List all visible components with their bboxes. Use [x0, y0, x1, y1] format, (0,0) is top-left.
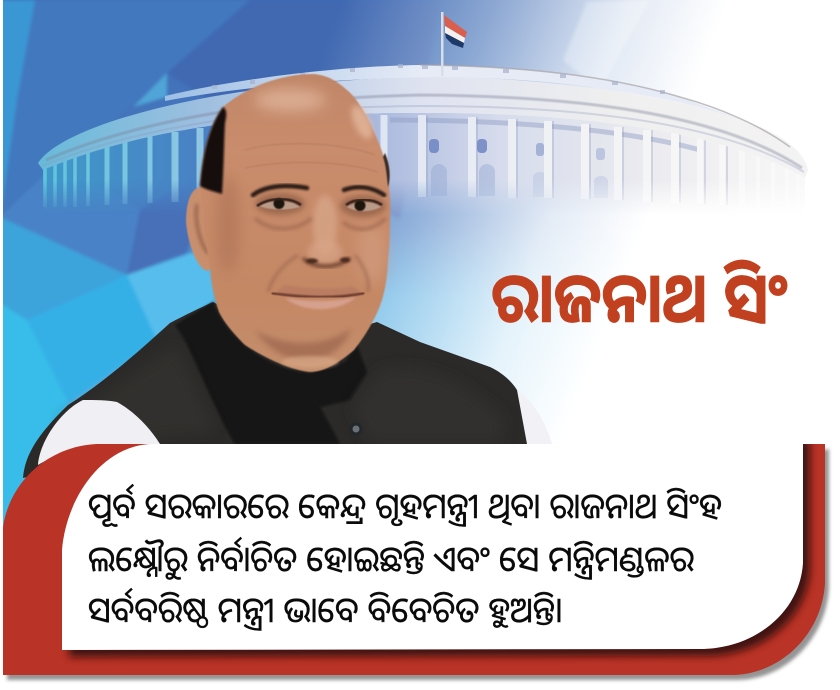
- panel: caption box: [3, 440, 829, 680]
- vest: [23, 302, 527, 478]
- forehead wrinkles: [245, 144, 378, 172]
- caption line 3: ସର୍ବବରିଷ୍ଠ ମନ୍ତ୍ରୀ ଭାବେ ବିବେଚିତ ହୁଅନ୍ତି।: [88, 588, 563, 631]
- right cheek light: [358, 225, 386, 285]
- column shading: [427, 115, 727, 205]
- portrait: Rajnath Singh: [23, 74, 552, 478]
- chin shading: [255, 328, 352, 360]
- caption text: [88, 484, 722, 631]
- caption line 1: ପୂର୍ବ ସରକାରରେ କେନ୍ଦ୍ର ଗୃହମନ୍ତ୍ରୀ ଥିବା ରାଜନାଥ ସିଂହ: [88, 484, 722, 527]
- left shirt shoulder: [38, 400, 160, 465]
- vest button: [350, 422, 362, 436]
- windows: [429, 139, 605, 160]
- parapet: [165, 65, 762, 127]
- mouth: [273, 293, 363, 297]
- left face shadow: [216, 175, 240, 275]
- nose bridge light: [313, 195, 337, 255]
- eyebrows: [253, 186, 307, 195]
- title: ରାଜନାଥ ସିଂ: [491, 259, 788, 337]
- vest collar band: [175, 302, 367, 444]
- head highlight: [254, 89, 326, 111]
- ear: [186, 187, 225, 271]
- hair: [200, 107, 226, 194]
- eyes: [259, 201, 300, 210]
- icon: flag: [441, 12, 467, 76]
- upper wall shade: [390, 120, 700, 150]
- icon: Parliament building: [38, 64, 808, 215]
- card shadow on red: [69, 440, 810, 657]
- under-eye bags: [255, 218, 312, 228]
- head: [200, 74, 390, 372]
- nasolabial folds: [268, 255, 298, 292]
- right shirt sleeve: [517, 390, 552, 444]
- eye sockets: [255, 193, 305, 215]
- white card: [62, 444, 803, 650]
- background: polygon blue backdrop: [3, 0, 702, 527]
- building wall: [43, 113, 805, 215]
- panel shadow: [7, 449, 829, 680]
- nose: [308, 240, 342, 264]
- red backing: [3, 444, 825, 675]
- entablature: [38, 76, 808, 178]
- columns: [43, 115, 701, 207]
- vest lit panels: [352, 367, 505, 444]
- caption line 2: ଲକ୍ଷ୍ନୌରୁ ନିର୍ବାଚିତ ହୋଇଛନ୍ତି ଏବଂ ସେ ମନ୍ତ୍ରିମଣ୍ଡଳର: [88, 537, 694, 580]
